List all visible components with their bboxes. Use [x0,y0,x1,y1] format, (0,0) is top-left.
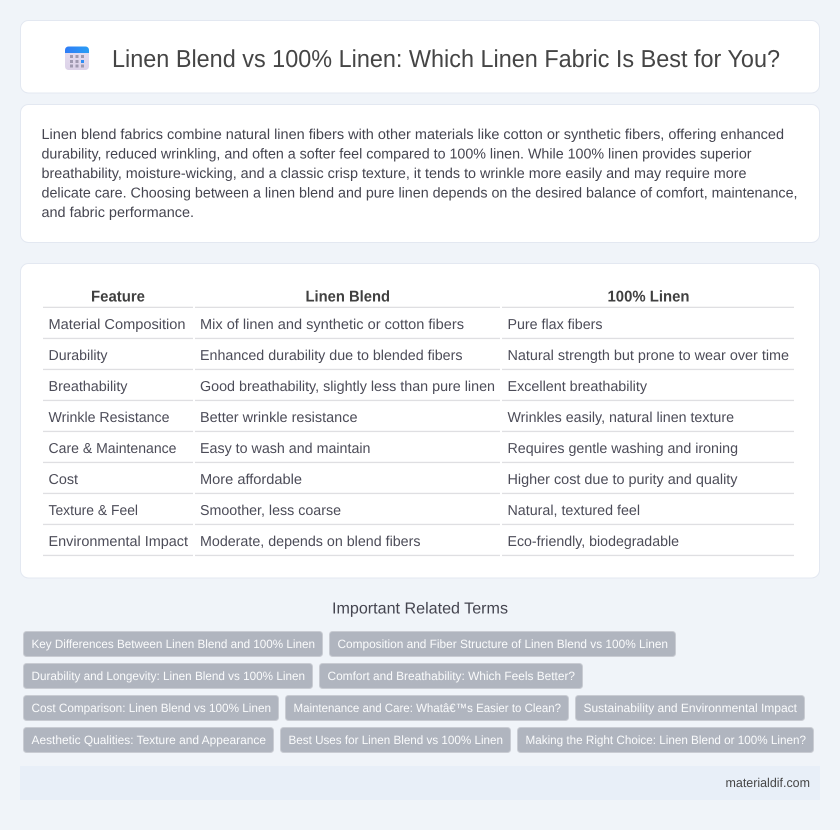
heading: important related terms: Important Related Terms [332,600,508,618]
tag [286,696,568,720]
intro paragraph [42,127,798,221]
table row: cost: More affordable [200,472,302,488]
table row: texture and feel: Texture & Feel [48,503,138,519]
panel: title header [20,20,820,93]
intro paragraph: delicate care. Choosing between a linen blend and pure linen depends on the desired balance of comfort, maintenance, [42,186,798,202]
tag: Durability and Longevity: Linen Blend vs 100% Linen [32,669,305,683]
table row: breathability: Breathability [48,379,128,395]
tag [24,728,274,752]
tag: Maintenance and Care: Whatâ€™s Easier to Clean? [294,701,561,715]
tag [320,664,582,688]
table row: care and maintenance: Requires gentle washing and ironing [508,441,738,457]
footer [20,766,820,800]
table header: Linen Blend [306,288,390,306]
tag [24,696,278,720]
table header: Feature [91,288,145,306]
intro paragraph: breathability, moisture-wicking, and a classic crisp texture, it tends to wrinkle more easily and may require more [42,166,746,182]
table row: wrinkle resistance [48,410,734,426]
table row: environmental impact: Moderate, depends on blend fibers [200,534,420,550]
table row: care and maintenance: Easy to wash and maintain [200,441,370,457]
intro paragraph: Linen blend fabrics combine natural linen fibers with other materials like cotton or synthetic fibers, offering enhanced [42,127,784,143]
tag: Aesthetic Qualities: Texture and Appearance [32,733,266,747]
table row: environmental impact [48,534,679,550]
table row: texture and feel [48,503,640,519]
table row: cost [48,472,738,488]
footer source text: materialdif.com [726,775,810,790]
table row: breathability: Good breathability, slightly less than pure linen [200,379,495,395]
table row: material composition [48,317,602,333]
tag [576,696,804,720]
table row: material composition: Mix of linen and synthetic or cotton fibers [200,317,464,333]
table row: cost: Higher cost due to purity and quality [508,472,738,488]
table row: material composition: Pure flax fibers [508,317,602,333]
tag [518,728,814,752]
panel: comparison table [20,264,820,578]
tag: Cost Comparison: Linen Blend vs 100% Linen [32,701,271,715]
table row: texture and feel: Natural, textured feel [508,503,640,519]
table row: material composition: Material Composition [48,317,186,333]
tag: Sustainability and Environmental Impact [584,701,798,715]
table row: environmental impact: Eco-friendly, biodegradable [508,534,679,550]
table row: durability: Durability [48,348,108,364]
intro paragraph: and fabric performance. [42,205,194,221]
tag [330,632,676,656]
icon: calendar [65,46,89,70]
tag: Making the Right Choice: Linen Blend or 100% Linen? [526,733,806,747]
table row: durability: Natural strength but prone to wear over time [508,348,789,364]
panel: introduction [20,104,820,242]
table header [91,288,690,306]
intro paragraph: durability, reduced wrinkling, and often a softer feel compared to 100% linen. While 100% linen provides superior [42,146,752,162]
related term tags [24,632,814,752]
table row: durability: Enhanced durability due to blended fibers [200,348,462,364]
tag: Key Differences Between Linen Blend and 100% Linen [32,637,315,651]
table row: environmental impact: Environmental Impact [48,534,188,550]
tag: Composition and Fiber Structure of Linen Blend vs 100% Linen [338,637,668,651]
table row: cost: Cost [48,472,78,488]
tag [24,632,322,656]
tag: Comfort and Breathability: Which Feels Better? [328,669,575,683]
tag: Best Uses for Linen Blend vs 100% Linen [288,733,503,747]
table row: wrinkle resistance: Wrinkle Resistance [48,410,170,426]
table header: 100% Linen [608,288,690,306]
table row: wrinkle resistance: Better wrinkle resistance [200,410,358,426]
tag [280,728,510,752]
table row: care and maintenance: Care & Maintenance [48,441,176,457]
table row: wrinkle resistance: Wrinkles easily, natural linen texture [508,410,734,426]
title: Linen Blend vs 100% Linen: Which Linen Fabric Is Best for You? [112,46,780,73]
table row: breathability [48,379,648,395]
tag [24,664,312,688]
table row: durability [48,348,789,364]
table row: breathability: Excellent breathability [508,379,648,395]
table row: texture and feel: Smoother, less coarse [200,503,341,519]
table row: care and maintenance [48,441,738,457]
